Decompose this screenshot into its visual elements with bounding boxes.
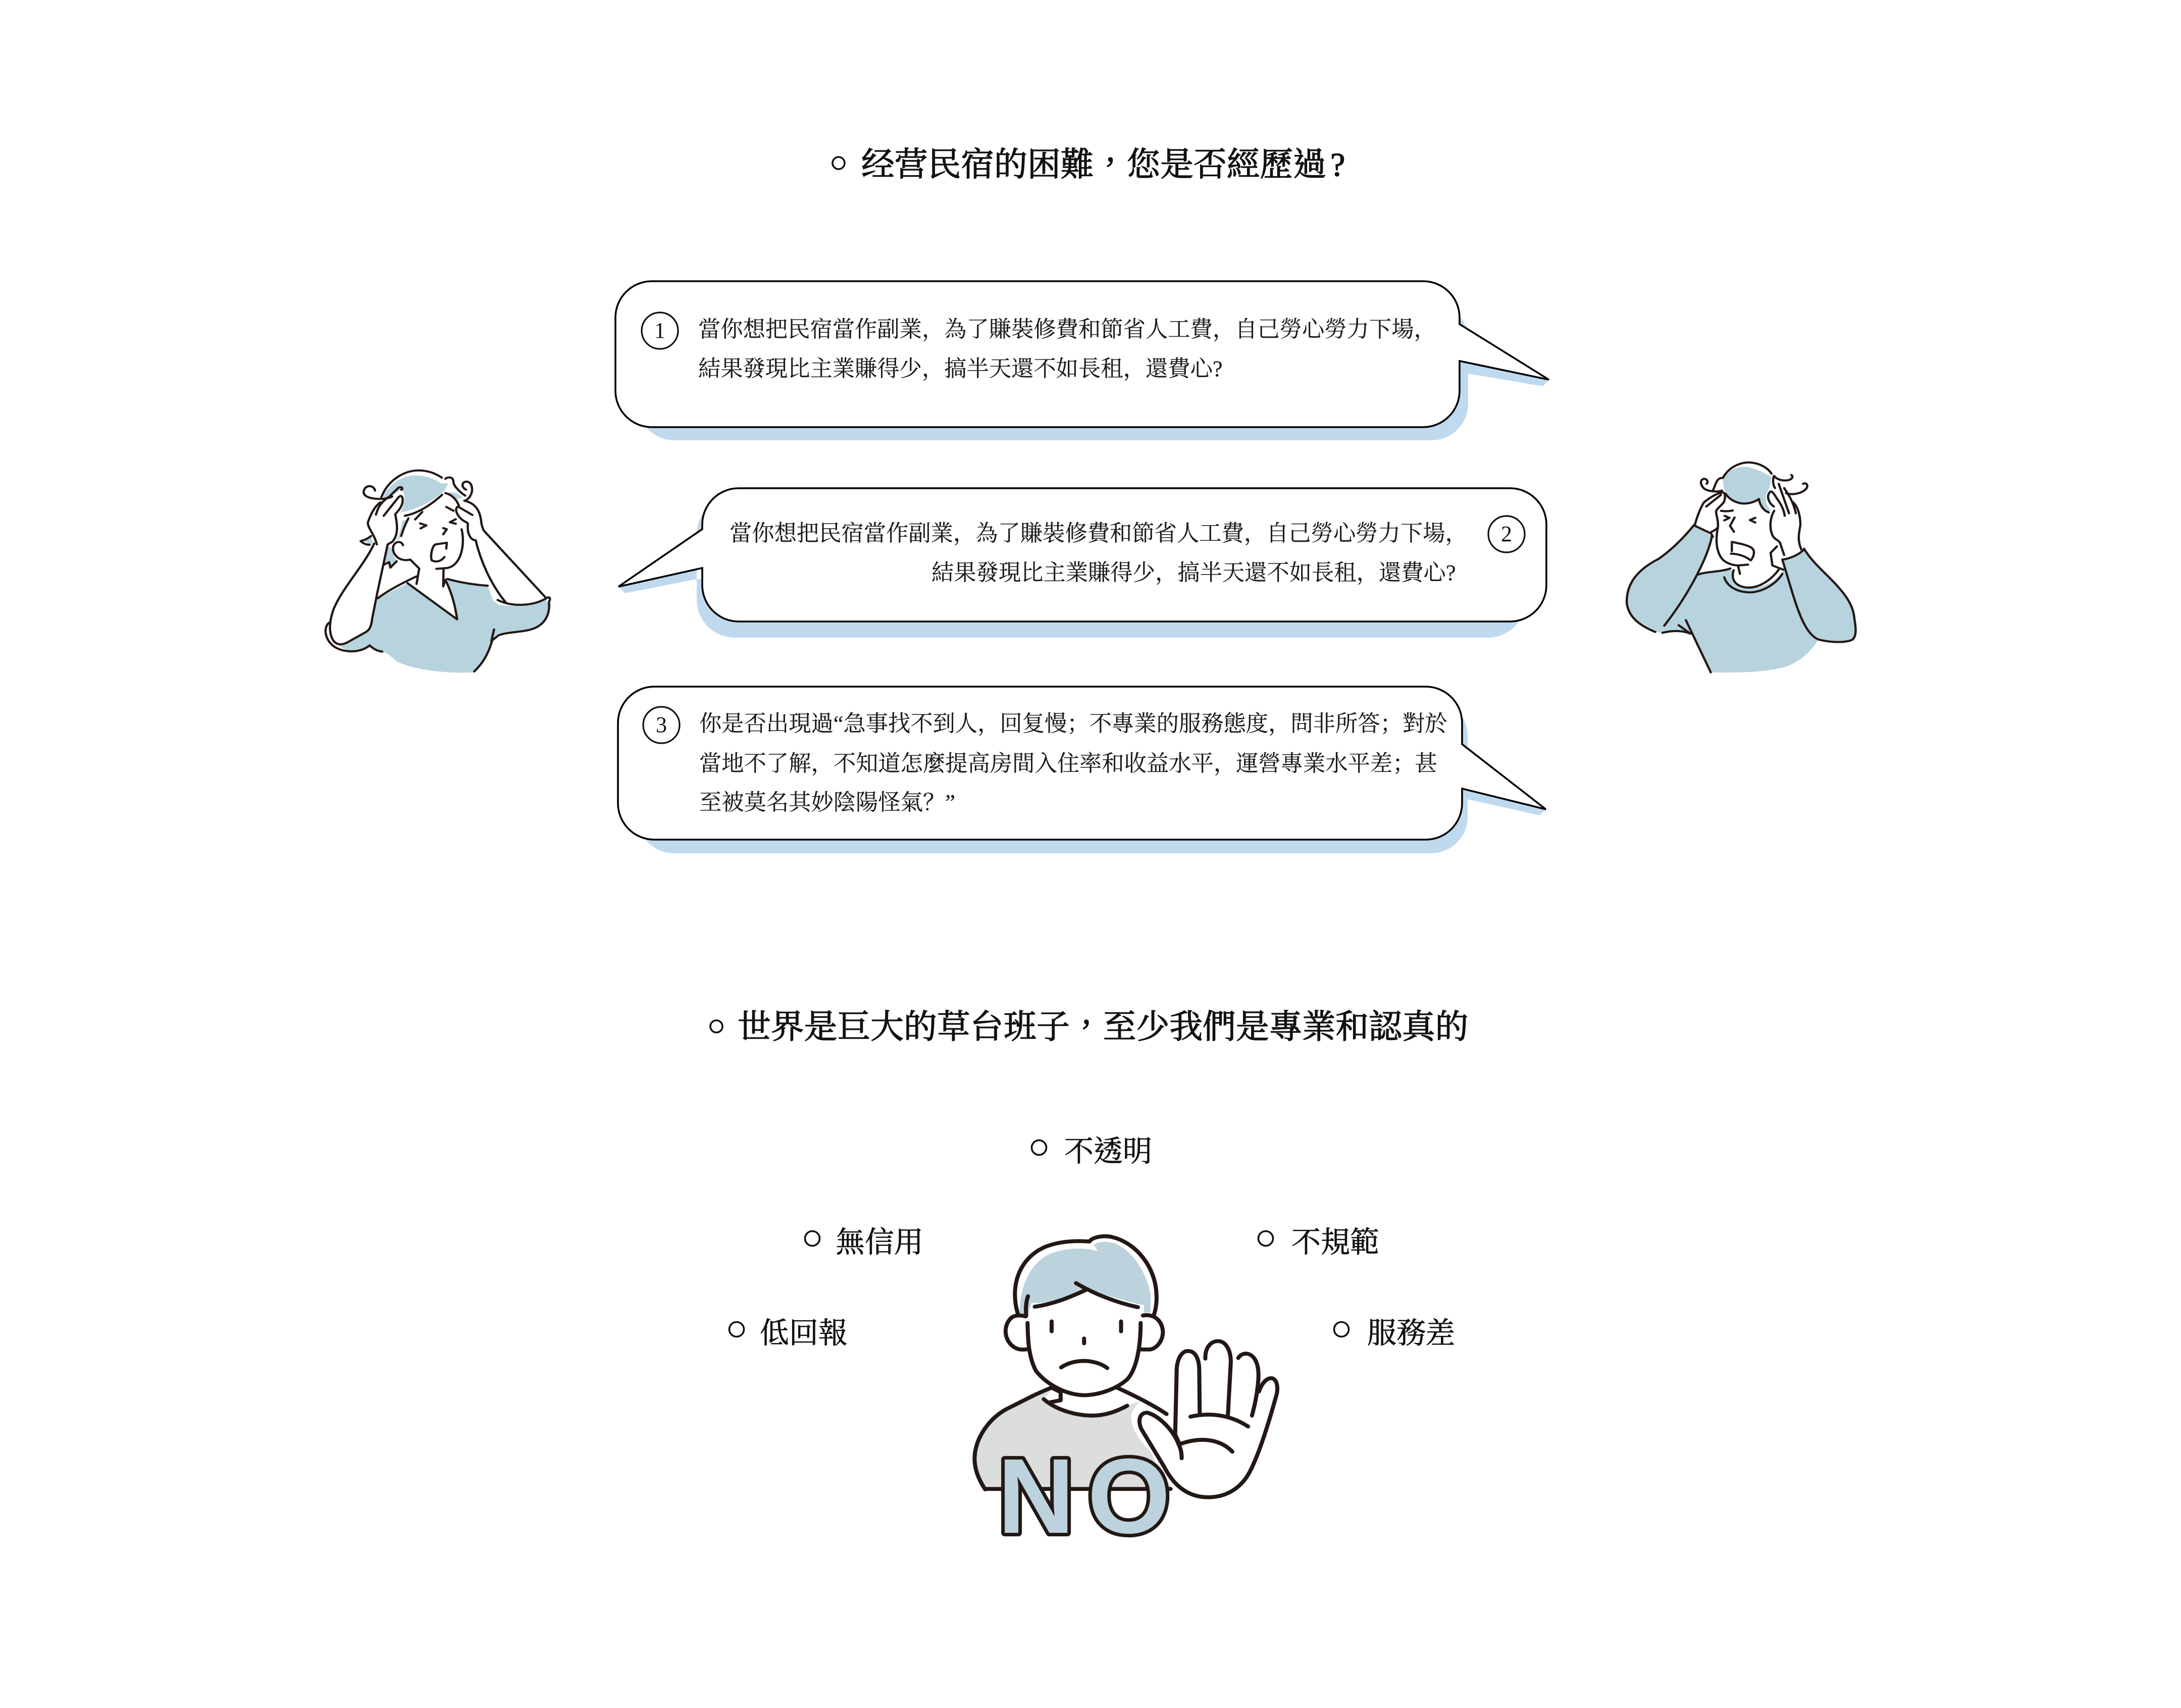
label: not standardised: 不規範	[1291, 1226, 1379, 1259]
speech bubble 1: 1	[654, 318, 665, 343]
label: not transparent: 不透明	[1064, 1135, 1152, 1168]
speech bubble 2: 2	[1501, 522, 1512, 546]
illustration: person with raised hand saying NO	[974, 1236, 1277, 1556]
speech bubble 1: 結果發現比主業賺得少，搞半天還不如長租，還費心?	[698, 356, 1223, 381]
speech bubble 1	[615, 281, 1549, 440]
NO lettering: NO	[998, 1436, 1170, 1556]
speech bubble 3: 你是否出現過“急事找不到人，回复慢；不專業的服務態度，問非所答；對於	[699, 711, 1447, 736]
illustration: worried woman holding her head	[326, 471, 550, 672]
speech bubble 3	[618, 687, 1546, 853]
speech bubble 3: 3	[656, 712, 667, 737]
speech bubble 3: 至被莫名其妙陰陽怪氣？”	[699, 790, 955, 815]
speech bubble 2	[618, 488, 1546, 638]
raised hand	[1139, 1341, 1277, 1497]
speech bubble 2: 結果發現比主業賺得少，搞半天還不如長租，還費心?	[931, 560, 1456, 585]
illustration: worried man holding his head	[1627, 462, 1856, 672]
label: low returns: 低回報	[760, 1317, 848, 1350]
title: difficulties of running a homestay: 经营民宿的困難，您是否經歷過?	[861, 146, 1345, 183]
speech bubble 3: 當地不了解，不知道怎麼提高房間入住率和收益水平，運營專業水平差；甚	[699, 751, 1437, 776]
speech bubble 1: 當你想把民宿當作副業，為了賺裝修費和節省人工費，自己勞心勞力下場，	[698, 317, 1436, 342]
speech bubble 2: 當你想把民宿當作副業，為了賺裝修費和節省人工費，自己勞心勞力下場，	[730, 521, 1468, 546]
label: no credibility: 無信用	[836, 1226, 923, 1259]
title: the world is a makeshift troupe: 世界是巨大的草台班子，至少我們是專業和認真的	[738, 1009, 1469, 1046]
label: poor service: 服務差	[1367, 1317, 1455, 1350]
